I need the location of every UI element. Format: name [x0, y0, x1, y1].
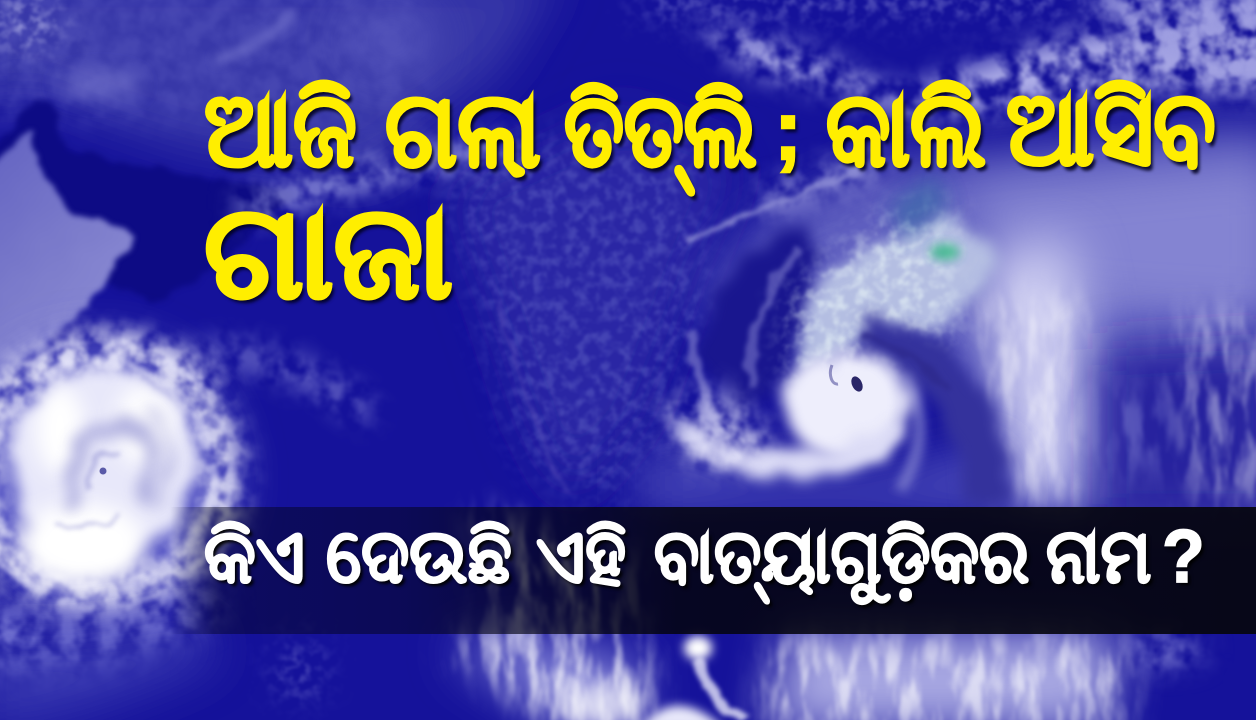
land: India haze	[440, 110, 740, 510]
headline line 1: ଆସିବ	[1006, 72, 1215, 187]
caption question	[204, 513, 1205, 608]
southern clouds	[0, 510, 1205, 720]
Gulf of Oman dark water	[0, 97, 300, 305]
caption question: ଦେଉଛି	[326, 514, 512, 598]
icon: eastern cyclone	[661, 335, 985, 505]
headline line 1: ;	[774, 83, 802, 177]
top cloud band	[640, 0, 1256, 115]
headline line 1: ଆଜି	[204, 72, 357, 188]
dark caption band	[0, 507, 1256, 634]
cloud streak across the sea	[240, 150, 510, 210]
headline line 1: ତିତ୍‌ଲି	[564, 73, 757, 187]
icon: western cyclone	[0, 343, 370, 613]
dark bands west of cyclone	[640, 220, 1010, 510]
headline line 1: ଗଲା	[385, 71, 541, 188]
eastern cloud shield	[690, 125, 1256, 520]
headline line 1: କାଲି	[826, 71, 986, 188]
cyan land-tinted cloud over Bay of Bengal	[790, 175, 1000, 400]
caption question: ?	[1162, 514, 1205, 598]
headline line 1	[204, 71, 1219, 202]
caption question: ନାମ	[1046, 513, 1152, 599]
headline line 2: ଗାଜା	[204, 179, 453, 325]
caption question: ଏହି	[536, 514, 626, 598]
caption question: କିଏ	[204, 514, 305, 598]
northern haze	[0, 0, 560, 175]
land: Arabian coast	[0, 125, 136, 400]
caption question: ବାତ୍ୟାଗୁଡ଼ିକର	[654, 514, 1029, 598]
